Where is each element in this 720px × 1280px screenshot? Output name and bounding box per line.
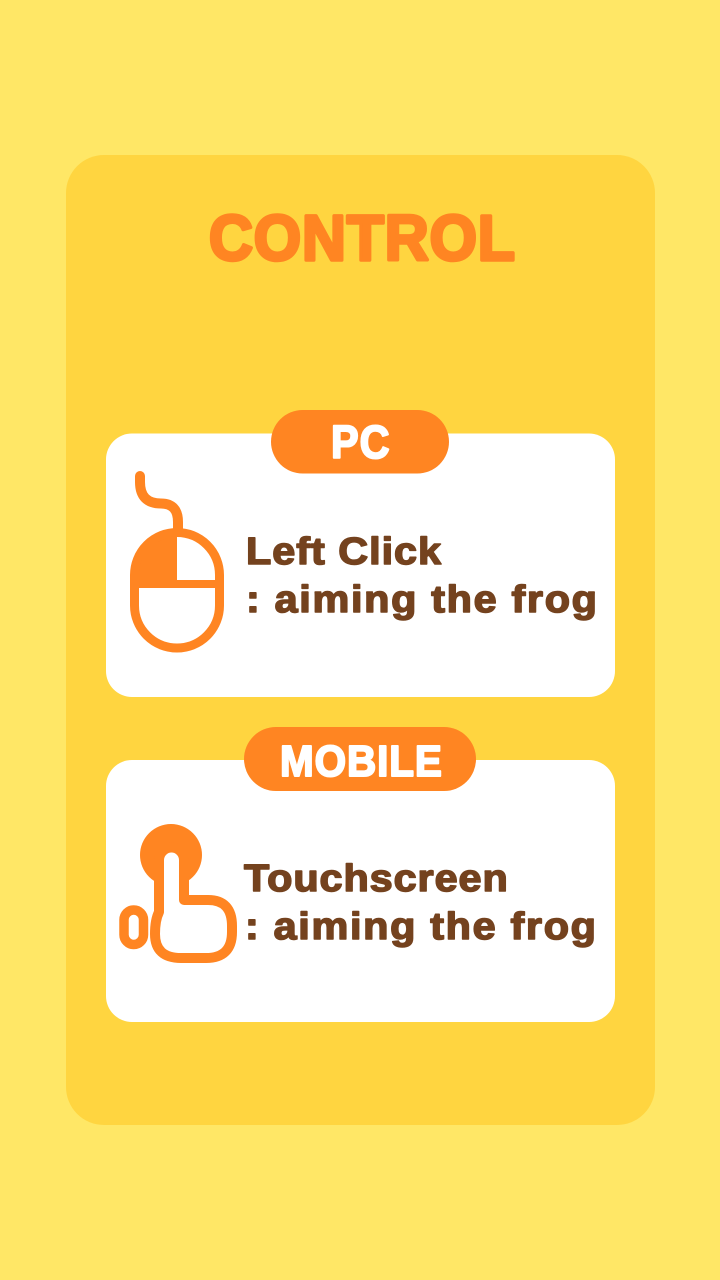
badge: MOBILE: MOBILE xyxy=(280,736,442,785)
title: CONTROL xyxy=(209,203,515,274)
text: PC instructions: : aiming the frog xyxy=(246,579,597,621)
panel: control xyxy=(66,155,655,1125)
icon: mouse xyxy=(134,476,220,648)
text: PC instructions xyxy=(246,531,597,621)
text: PC instructions: Left Click xyxy=(246,531,442,573)
badge: MOBILE xyxy=(244,727,476,791)
panel: mobile controls xyxy=(106,727,615,1022)
text: mobile instructions: Touchscreen xyxy=(244,858,508,900)
icon: touch gesture xyxy=(124,824,232,958)
text: mobile instructions: : aiming the frog xyxy=(245,906,596,948)
text: mobile instructions xyxy=(244,858,596,948)
badge: PC: PC xyxy=(331,417,390,469)
badge: PC xyxy=(271,410,449,474)
panel: PC controls xyxy=(106,410,615,697)
